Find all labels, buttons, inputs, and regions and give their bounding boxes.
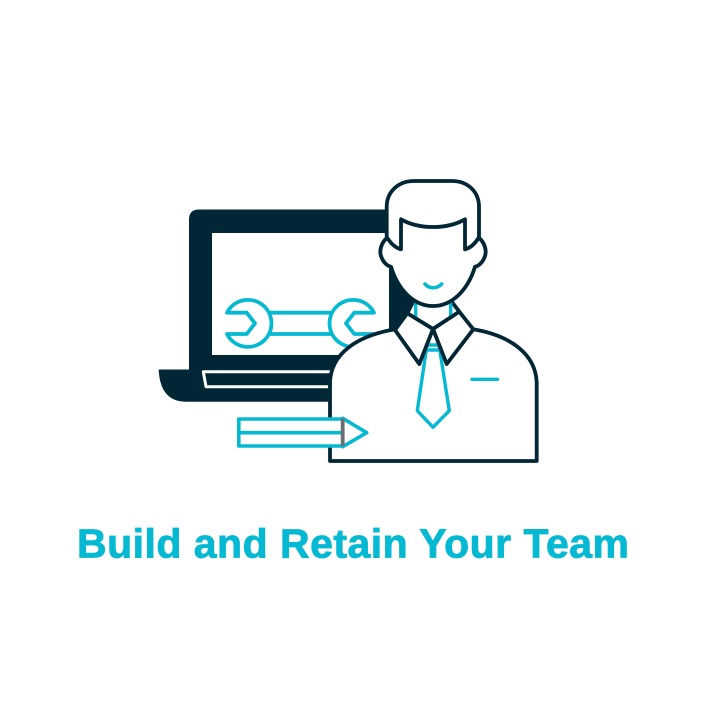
title: Build and Retain Your Team [77, 520, 629, 566]
smile [425, 284, 442, 288]
body [330, 329, 537, 461]
hair [387, 181, 479, 249]
icon: laptop [159, 210, 430, 402]
face and ears [380, 205, 486, 306]
icon: pencil [239, 418, 367, 447]
neck [407, 302, 459, 329]
icon: businessman [330, 181, 537, 461]
tie [417, 345, 449, 427]
icon: wrench [227, 300, 374, 347]
collar [395, 312, 473, 364]
shirt pocket [472, 378, 498, 381]
